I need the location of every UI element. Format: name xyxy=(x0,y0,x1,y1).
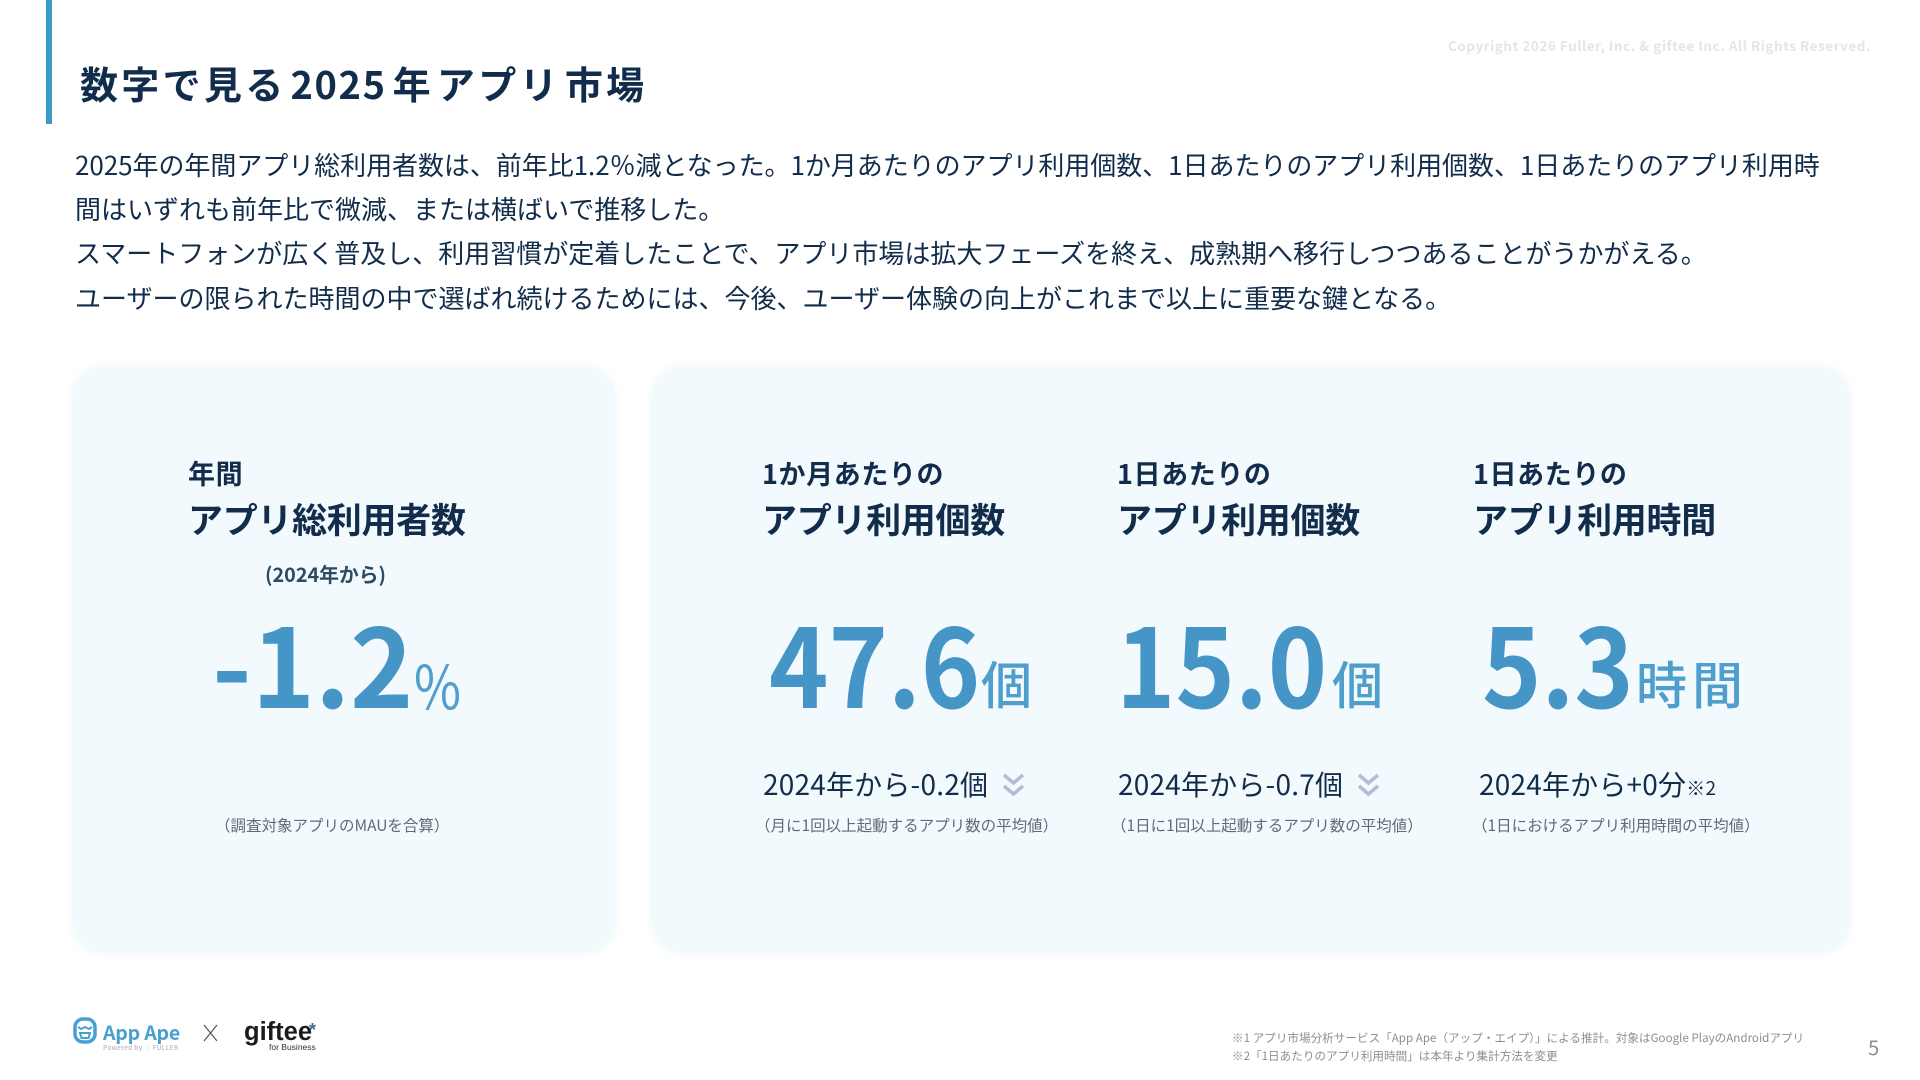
page number: 5 xyxy=(1868,1032,1879,1061)
stat: 5.3 hours xyxy=(1482,583,1748,740)
logo: App Ape xyxy=(73,1017,180,1052)
stat: -1.2 percent: -1.2 xyxy=(212,583,413,740)
title: 数字で見る2025年アプリ市場 xyxy=(80,55,647,110)
panel: annual total users xyxy=(72,366,615,953)
footnotes xyxy=(1232,1030,1804,1064)
stat: 15.0 apps: 個 xyxy=(1332,645,1383,719)
heading: monthly apps: アプリ利用個数 xyxy=(762,493,1005,544)
comparison label: (2024年から) xyxy=(265,559,386,588)
heading: daily time: アプリ利用時間 xyxy=(1473,493,1716,544)
note: （調査対象アプリのMAUを合算） xyxy=(215,814,449,836)
icon: double chevron down xyxy=(1358,774,1379,796)
icon: double chevron down xyxy=(1003,774,1024,796)
note: daily apps: （1日に1回以上起動するアプリ数の平均値） xyxy=(1111,814,1423,836)
panel: usage stats xyxy=(652,366,1850,953)
multiply symbol xyxy=(204,1024,218,1042)
comparison: monthly apps: 2024年から-0.2個 xyxy=(763,764,988,804)
heading: daily apps xyxy=(1117,453,1360,544)
logo: giftee for Business: * xyxy=(309,1020,316,1040)
stat: 5.3 hours: 時間 xyxy=(1636,645,1748,719)
logo: App Ape: App Ape xyxy=(103,1017,180,1046)
summary text: スマートフォンが広く普及し、利用習慣が定着したことで、アプリ市場は拡大フェーズを終え、成熟期へ移行しつつあることがうかがえる。 xyxy=(75,234,1707,271)
footnotes: ※1 アプリ市場分析サービス「App Ape（アップ・エイプ）」による推計。対象はGoogle PlayのAndroidアプリ xyxy=(1232,1030,1804,1046)
copyright: Copyright 2026 Fuller, Inc. & giftee Inc. All Rights Reserved. xyxy=(1448,35,1871,55)
heading: monthly apps: 1か月あたりの xyxy=(762,453,944,492)
note: daily time: （1日におけるアプリ利用時間の平均値） xyxy=(1472,814,1760,836)
summary text: ユーザーの限られた時間の中で選ばれ続けるためには、今後、ユーザー体験の向上がこれまで以上に重要な鍵となる。 xyxy=(75,279,1451,316)
heading: daily time: 1日あたりの xyxy=(1473,453,1628,492)
comparison: daily time: 2024年から+0分※2 xyxy=(1479,764,1716,804)
summary text: 2025年の年間アプリ総利用者数は、前年比1.2％減となった。1か月あたりのアプリ利用個数、1日あたりのアプリ利用個数、1日あたりのアプリ利用時 xyxy=(75,146,1820,183)
stat: 5.3 hours: 5.3 xyxy=(1482,583,1634,740)
summary text: 間はいずれも前年比で微減、または横ばいで推移した。 xyxy=(75,190,724,227)
title accent bar xyxy=(46,0,52,124)
stat: 15.0 apps: 15.0 xyxy=(1116,583,1327,740)
logo: giftee for Business: for Business xyxy=(269,1042,316,1052)
note: monthly apps: （月に1回以上起動するアプリ数の平均値） xyxy=(755,814,1058,836)
comparison: daily apps: 2024年から-0.7個 xyxy=(1118,764,1343,804)
heading: total app users: アプリ総利用者数 xyxy=(188,493,466,544)
heading: annual: 年間 xyxy=(188,453,243,492)
summary text xyxy=(75,146,1820,316)
heading: daily time xyxy=(1473,453,1716,544)
logo: App Ape: Powered by ｜ FULLER xyxy=(103,1042,178,1052)
heading: monthly apps xyxy=(762,453,1005,544)
logo: giftee for Business: giftee xyxy=(244,1018,312,1046)
percent unit: % xyxy=(414,640,461,727)
stat: 47.6 apps: 個 xyxy=(981,645,1032,719)
stat: 47.6 apps: 47.6 xyxy=(769,583,980,740)
heading: daily apps: 1日あたりの xyxy=(1117,453,1272,492)
footnotes: ※2「1日あたりのアプリ利用時間」は本年より集計方法を変更 xyxy=(1232,1048,1558,1064)
heading: daily apps: アプリ利用個数 xyxy=(1117,493,1360,544)
